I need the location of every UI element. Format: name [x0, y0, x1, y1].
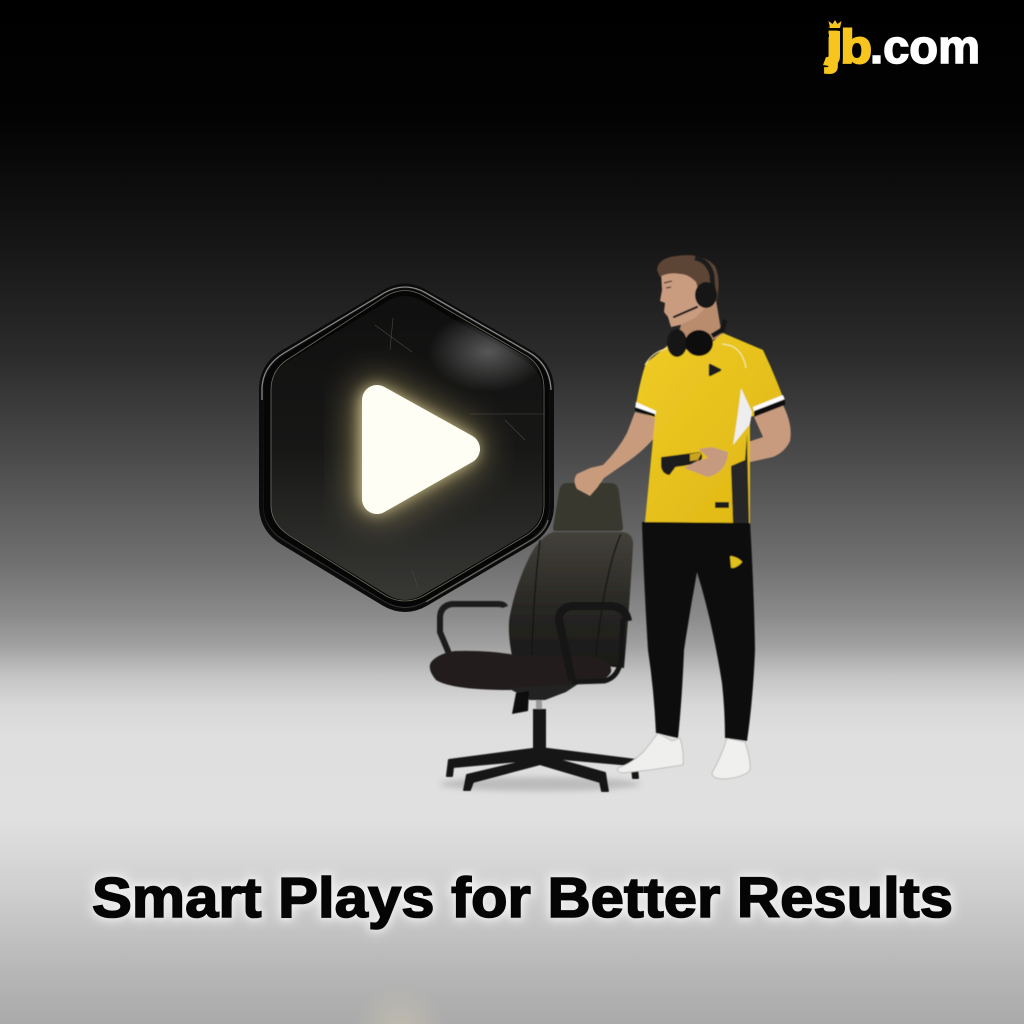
face	[660, 262, 708, 327]
headset band	[695, 258, 713, 290]
chrome post	[536, 700, 542, 710]
play triangle glow	[376, 402, 462, 497]
surface scratches	[375, 318, 545, 588]
shirt hem label	[715, 502, 729, 508]
back panel seams	[532, 534, 621, 655]
headphone neck band	[712, 320, 725, 336]
chair back	[509, 532, 633, 668]
headphone cup: right	[685, 330, 713, 356]
title glow: Smart Plays for Better Results	[92, 866, 953, 930]
gas column	[533, 709, 546, 755]
far armrest	[440, 604, 505, 656]
office chair	[430, 483, 640, 791]
star base	[447, 748, 638, 791]
trouser logo	[731, 557, 741, 567]
logo jb mark	[823, 20, 872, 73]
trousers	[642, 522, 755, 741]
game controller	[662, 453, 701, 474]
j stem and hook	[823, 31, 840, 66]
shoe: left	[618, 733, 683, 773]
shirt logo	[710, 365, 720, 375]
icon: crown	[828, 20, 842, 28]
hair	[657, 255, 719, 300]
shoe: right	[712, 738, 750, 779]
title: Smart Plays for Better Results	[92, 866, 953, 930]
shirt sleeve band left	[635, 407, 655, 417]
seat mechanism	[508, 684, 578, 700]
headphone cup: left	[667, 329, 687, 357]
logo letters jb: jb	[825, 20, 872, 73]
crown gap	[826, 28, 842, 31]
eye and brow	[664, 281, 672, 288]
shirt white side panel	[733, 388, 752, 445]
play triangle halo	[376, 402, 462, 497]
left arm	[574, 412, 655, 496]
headrest	[553, 483, 623, 531]
shirt cuff band	[754, 399, 785, 417]
hand on controller	[684, 447, 728, 477]
hexagon body	[261, 286, 552, 610]
adjustment lever	[512, 691, 529, 714]
shirt raglan seams	[645, 344, 746, 368]
surface sheen	[435, 320, 536, 387]
headset ear cup	[695, 282, 717, 308]
shirt sleeve cuff: right	[753, 395, 785, 412]
play triangle	[377, 400, 465, 499]
armrest support	[572, 618, 623, 682]
hexagon inner line	[271, 290, 544, 601]
hexagon outer highlight top	[262, 287, 551, 400]
neck headphones	[667, 320, 725, 357]
floor glow	[350, 986, 450, 1024]
player figure	[574, 255, 791, 779]
neck	[676, 300, 722, 350]
hexagon dark rim	[267, 292, 546, 604]
right arm	[684, 405, 791, 477]
shirt sleeve cuff: left	[635, 402, 656, 417]
brand logo	[823, 20, 980, 73]
logo text .com: .com	[870, 20, 980, 73]
headset	[674, 258, 717, 317]
chair floor shadow	[440, 777, 640, 791]
hexagon lower right gloss	[426, 520, 548, 602]
near armrest	[559, 606, 628, 680]
t-shirt	[635, 333, 785, 523]
hexagon play badge	[261, 286, 552, 610]
controller yellow trim	[690, 452, 702, 461]
headset microphone	[674, 307, 697, 317]
seat cushion	[430, 651, 611, 690]
shirt black side panel	[731, 434, 749, 523]
